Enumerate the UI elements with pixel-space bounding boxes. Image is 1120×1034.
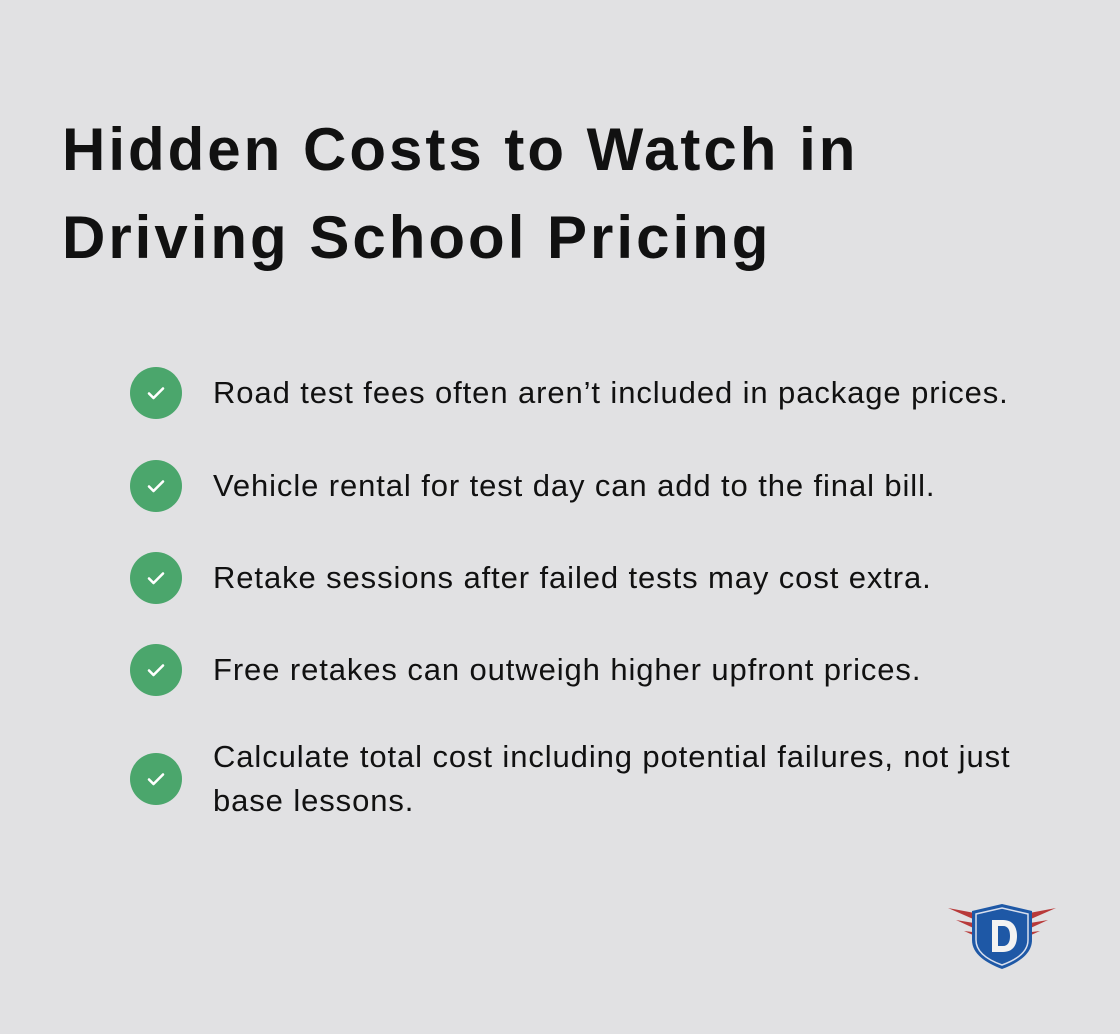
item 4: [130, 644, 921, 696]
icon: check: [130, 644, 182, 696]
icon: check: [130, 367, 182, 419]
icon: check: [130, 552, 182, 604]
title: [62, 116, 858, 271]
title: Driving School Pricing: [62, 204, 771, 271]
item 3: Retake sessions after failed tests may cost extra.: [213, 560, 932, 595]
icon: check: [130, 460, 182, 512]
item 2: [130, 460, 935, 512]
logo: [948, 904, 1056, 969]
item 3: [130, 552, 932, 604]
item 1: [130, 367, 1009, 419]
item 2: Vehicle rental for test day can add to the final bill.: [213, 468, 935, 503]
item 1: Road test fees often aren’t included in package prices.: [213, 375, 1009, 410]
title: Hidden Costs to Watch in: [62, 116, 858, 183]
item 5: Calculate total cost including potential failures, not just: [213, 739, 1011, 774]
item 5: [130, 739, 1011, 818]
item 4: Free retakes can outweigh higher upfront prices.: [213, 652, 921, 687]
item 5: base lessons.: [213, 783, 414, 818]
icon: check: [130, 753, 182, 805]
